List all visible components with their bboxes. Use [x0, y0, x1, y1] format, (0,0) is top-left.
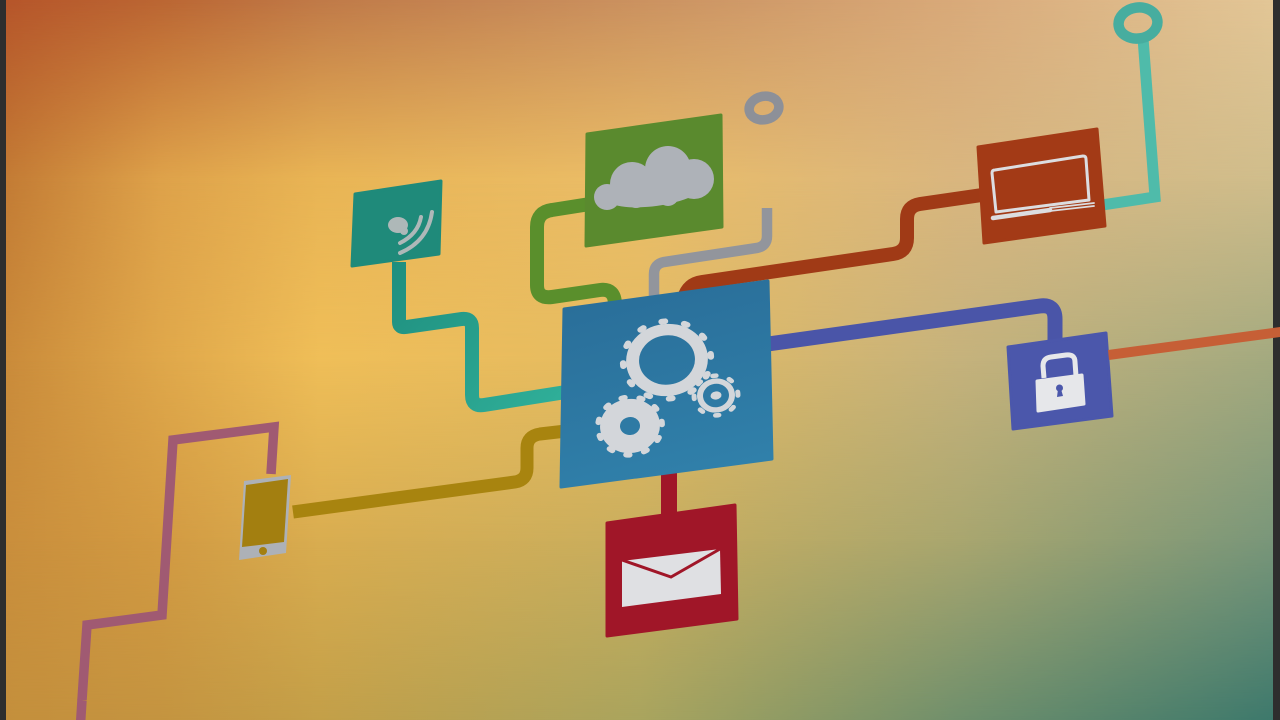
connector: blue line to lock: [768, 306, 1055, 345]
connector: green line from cloud: [537, 204, 615, 305]
icon: cloud: [594, 146, 714, 213]
icon: large gear: [618, 316, 716, 404]
panel: mail: [607, 505, 737, 636]
icon: lower gear: [594, 393, 666, 459]
connector: mauve line to phone: [76, 427, 274, 720]
icon: small gear: [691, 373, 741, 418]
connector: brown line to laptop: [684, 195, 982, 298]
icon: envelope: [622, 549, 721, 607]
connector: teal line from wifi: [399, 262, 566, 405]
icon: laptop: [992, 156, 1094, 218]
panel: central gears: [561, 281, 772, 487]
connector: orange line from lock: [1108, 327, 1280, 360]
connector: light teal line and ring: [1102, 5, 1159, 205]
panel: laptop: [978, 129, 1105, 243]
icon: smartphone: [239, 475, 291, 560]
panel: lock: [1008, 333, 1112, 429]
panel: cloud: [586, 115, 722, 246]
icon: padlock: [1037, 355, 1084, 411]
connector: grey line with stub: [654, 208, 767, 300]
connector: gold line from phone: [293, 431, 566, 512]
connector: red stem to mail: [661, 470, 677, 520]
icon: grey ring: [747, 93, 781, 123]
icon: wifi signal: [388, 212, 432, 253]
panel: wifi: [352, 181, 441, 266]
